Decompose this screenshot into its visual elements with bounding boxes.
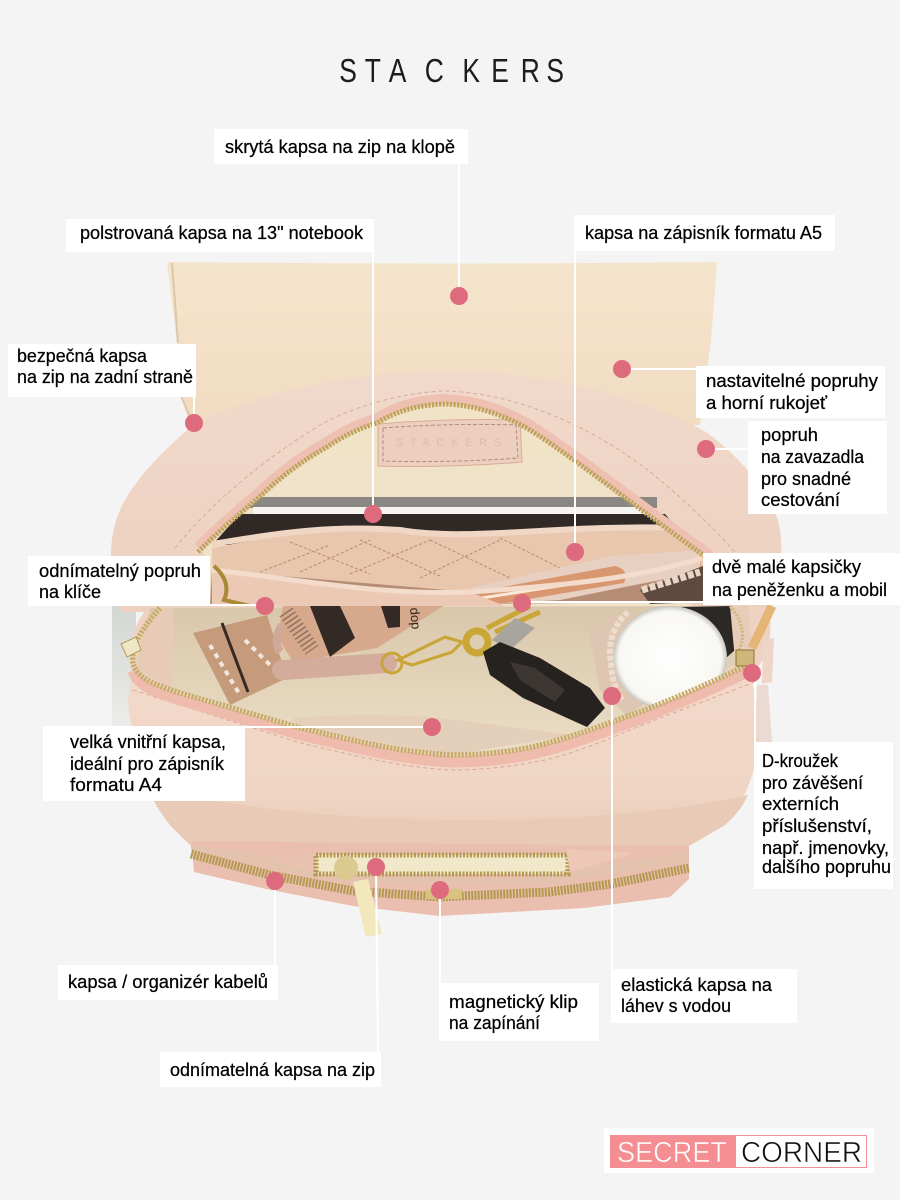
label: kapsa na zápisník: kapsa na zápisník formatu A5 [585,223,822,243]
leather logo patch: STACKERS [396,437,501,449]
label: odnímatelný popruh [28,556,210,606]
small pockets with phone [210,550,703,612]
label: bezpečná kapsa: bezpečná kapsa [17,346,148,366]
label: nastavitelné popruhy: nastavitelné popruhy [706,371,878,391]
label: odnímatelný popruh: odnímatelný popruh [39,561,201,581]
lower fold shading [146,785,748,846]
label: velká vnitřní kapsa: formatu A4 [70,775,162,795]
label: velká vnitřní kapsa [43,726,245,801]
lower seam stitching [133,682,755,770]
laptop [212,497,690,545]
lower compartment lining [135,606,745,755]
leader lines [194,164,755,1052]
label: magnetický klip [439,983,599,1041]
label: velká vnitřní kapsa: ideální pro zápisník [70,754,225,774]
label: polstrovaná kapsa [66,219,374,252]
logo: Secret Corner [604,1128,874,1173]
bottom organiser pocket [191,841,689,916]
title: STACKERS [339,53,564,90]
upper zipper [198,399,710,560]
label: kapsa / organizér kabelů [58,965,278,1000]
label: D-kroužek: D-kroužek [762,751,839,771]
backpack illustration [111,262,781,937]
label: kapsa na zápisník [574,215,835,251]
flap fold line [172,263,190,418]
upper compartment lining [203,404,705,610]
label: polstrovaná kapsa: polstrovaná kapsa na 13" notebook [80,223,364,243]
left zipper pull [121,637,141,657]
grey shadow left of body [112,606,136,726]
lower body back wall [131,606,770,760]
label: popruh na zavazadla: popruh [761,425,818,445]
ruffle of elastic pocket [610,612,628,700]
label: popruh na zavazadla: cestování [761,490,840,510]
label: odnímatelná kapsa na zip: odnímatelná kapsa na zip [170,1060,375,1080]
left gold key ring hardware [214,566,250,606]
label: dvě malé kapsičky: na peněženku a mobil [712,580,887,600]
leather logo patch [378,420,522,466]
marker dots [185,287,761,899]
label: D-kroužek: pro závěšení [762,773,863,793]
label: elastická kapsa: elastická kapsa na [621,975,773,995]
right pocket side [730,606,752,660]
lower front body [128,665,759,846]
printed packet [278,606,443,662]
printed packet: dop [407,607,424,630]
logo: Secret Corner: SECRET [617,1137,727,1169]
quilted laptop pocket [212,527,706,592]
label: D-kroužek: externích [762,794,839,814]
label: elastická kapsa [611,969,797,1023]
label: kapsa / organizér kabelů: kapsa / organizér kabelů [68,972,268,992]
label: popruh na zavazadla [748,421,887,514]
label: odnímatelný popruh: na klíče [39,582,101,602]
label: D-kroužek: např. jmenovky, [762,838,889,858]
label: nastavitelné popruhy [696,366,885,418]
label: D-kroužek: dalšího popruhu [762,857,891,877]
label: dvě malé kapsičky [703,553,900,605]
label: skrytá kapsa: skrytá kapsa na zip na klopě [225,137,455,157]
flap [167,262,717,425]
label: magnetický klip: magnetický klip [449,992,578,1012]
label: skrytá kapsa [214,129,468,164]
label: bezpečná kapsa [8,344,196,397]
brown instruction tag [193,615,287,705]
label: magnetický klip: na zapínání [449,1013,540,1033]
keys [466,606,540,653]
right side strap [756,685,772,742]
D-ring hardware [736,606,774,684]
upper seam stitching [175,391,735,552]
water bottle [613,606,727,710]
black car key fob [483,642,605,727]
upper dome [111,371,781,612]
lower zipper [133,606,747,762]
label: popruh na zavazadla: pro snadné [761,469,851,489]
label: velká vnitřní kapsa: velká vnitřní kapsa, [70,732,226,752]
label: D-kroužek [754,742,893,889]
inner A4 pocket [293,715,573,755]
strap with clasp [276,625,462,673]
label: dvě malé kapsičky: dvě malé kapsičky [712,557,861,577]
label: popruh na zavazadla: na zavazadla [761,447,865,467]
logo: Secret Corner: CORNER [741,1137,862,1169]
label: bezpečná kapsa: na zip na zadní straně [17,367,193,387]
left inner wall [137,608,174,690]
label: odnímatelná kapsa na zip [160,1052,381,1087]
water bottle pocket [588,608,650,716]
front zip pocket [273,849,635,878]
label: elastická kapsa: láhev s vodou [621,996,731,1016]
label: nastavitelné popruhy: a horní rukojeť [706,393,827,413]
dark pocket shade behind bottle [680,606,735,690]
zipper puller [334,856,382,937]
label: D-kroužek: příslušenství, [762,816,872,836]
